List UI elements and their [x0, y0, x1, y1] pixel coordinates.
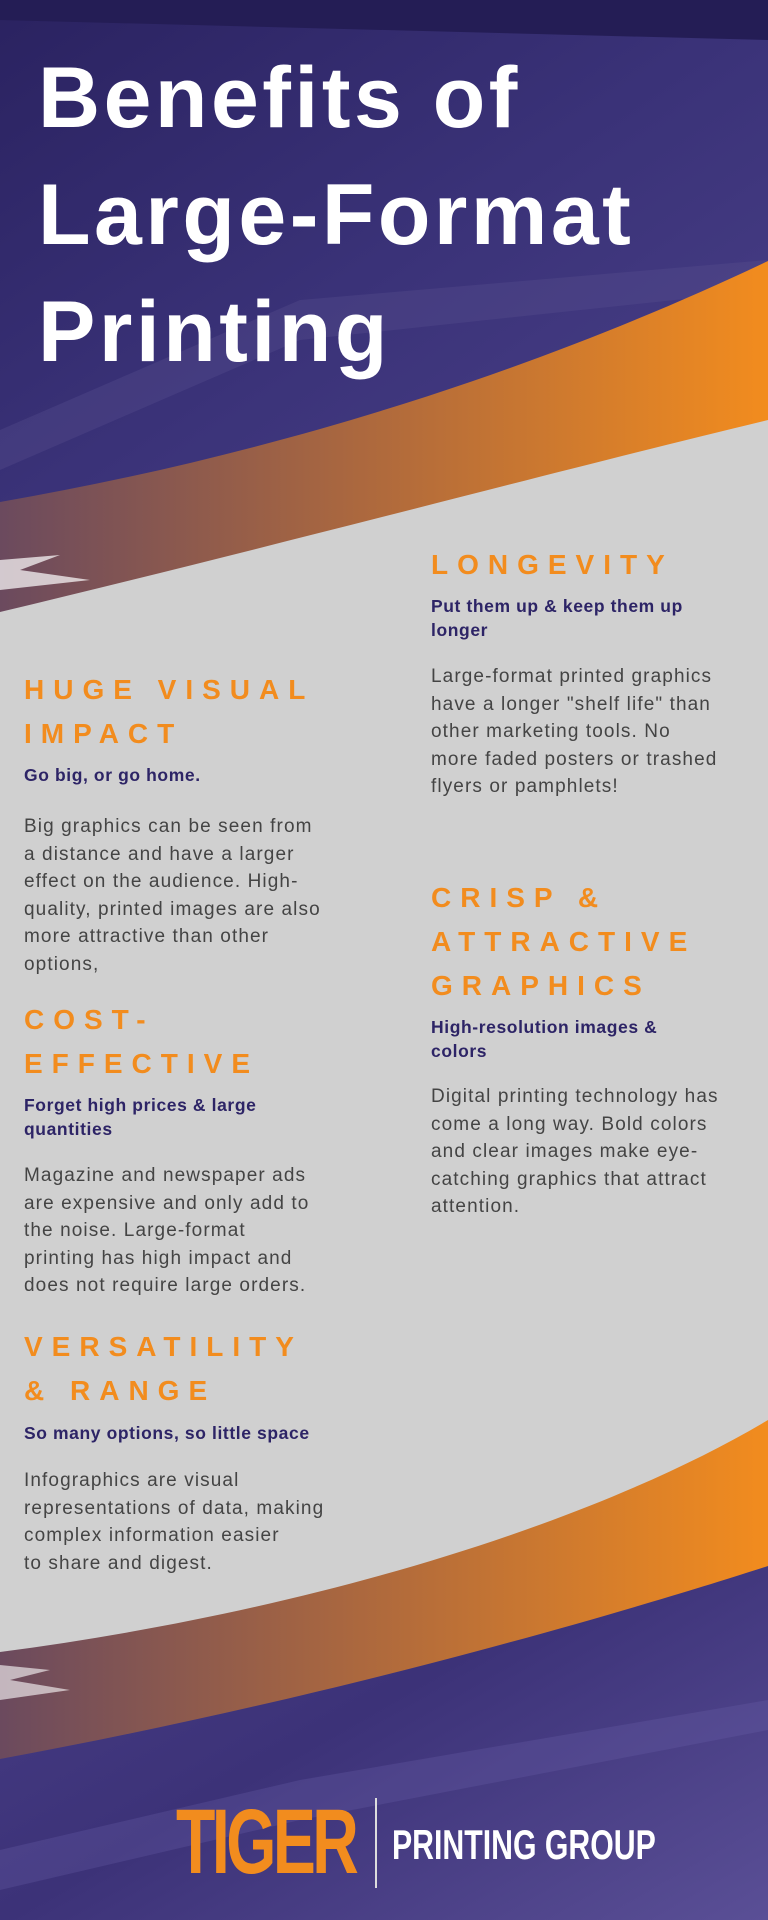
heading: EFFECTIVE: [24, 1048, 259, 1079]
body text: are expensive and only add to: [24, 1192, 309, 1214]
logo text: PRINTING GROUP: [392, 1821, 656, 1868]
title: Printing: [38, 284, 391, 380]
body text: printing has high impact and: [24, 1248, 292, 1268]
subheading: colors: [431, 1041, 487, 1061]
body text: quality, printed images are also: [24, 898, 321, 920]
orange brush stroke top: [0, 261, 768, 612]
body text: flyers or pamphlets!: [431, 776, 619, 797]
heading: IMPACT: [24, 718, 183, 749]
body text: the noise. Large-format: [24, 1220, 246, 1241]
body text: more faded posters or trashed: [431, 748, 717, 770]
body text: [431, 666, 717, 797]
body text: [431, 1086, 719, 1217]
body text: other marketing tools. No: [431, 721, 671, 742]
subheading: High-resolution images &: [431, 1017, 657, 1037]
body text: Big graphics can be seen from: [24, 816, 313, 837]
title: Large-Format: [38, 167, 634, 263]
subheading: Go big, or go home.: [24, 765, 201, 785]
body text: come a long way. Bold colors: [431, 1114, 708, 1134]
heading: & RANGE: [24, 1375, 216, 1406]
orange brush stroke bottom: [0, 1420, 768, 1759]
logo: tiger printing group: [176, 1791, 656, 1893]
heading: [24, 1004, 259, 1079]
body text: have a longer "shelf life" than: [431, 694, 711, 714]
panel: longevity: [431, 549, 717, 797]
body text: more attractive than other: [24, 926, 269, 947]
subheading: So many options, so little space: [24, 1423, 310, 1443]
logo divider: [375, 1798, 377, 1888]
body text: options,: [24, 954, 99, 974]
heading: ATTRACTIVE: [431, 926, 696, 957]
subheading: Forget high prices & large: [24, 1095, 256, 1115]
subheading: [431, 1017, 657, 1061]
heading: [431, 882, 696, 1001]
heading: LONGEVITY: [431, 549, 674, 580]
body text: effect on the audience. High-: [24, 871, 298, 892]
body text: and clear images make eye-: [431, 1141, 698, 1162]
heading: [24, 1331, 303, 1406]
body text: Digital printing technology has: [431, 1086, 719, 1107]
logo wordmark TIGER: TIGER: [176, 1791, 355, 1893]
body text: does not require large orders.: [24, 1275, 306, 1296]
subheading: [431, 596, 683, 640]
panel: cost-effective: [24, 1004, 309, 1296]
heading: CRISP &: [431, 882, 607, 913]
body text: [24, 1470, 324, 1574]
body text: catching graphics that attract: [431, 1168, 707, 1190]
title: [38, 50, 634, 380]
panel: huge visual impact: [24, 674, 321, 974]
heading: COST-: [24, 1004, 155, 1035]
body text: complex information easier: [24, 1525, 280, 1546]
heading: [24, 674, 314, 749]
body text: Infographics are visual: [24, 1470, 239, 1491]
subheading: quantities: [24, 1119, 113, 1139]
heading: GRAPHICS: [431, 970, 651, 1001]
heading: HUGE VISUAL: [24, 674, 314, 705]
subheading: longer: [431, 620, 488, 640]
subheading: [24, 1095, 256, 1139]
heading: VERSATILITY: [24, 1331, 303, 1362]
body text: [24, 816, 321, 974]
subheading: Put them up & keep them up: [431, 596, 683, 616]
title: Benefits of: [38, 50, 521, 146]
body text: a distance and have a larger: [24, 844, 295, 864]
body text: [24, 1165, 309, 1296]
panel: crisp & attractive graphics: [431, 882, 719, 1217]
body text: to share and digest.: [24, 1552, 213, 1574]
body text: Magazine and newspaper ads: [24, 1165, 306, 1186]
panel: versatility & range: [24, 1331, 324, 1574]
body text: representations of data, making: [24, 1498, 324, 1518]
body text: attention.: [431, 1196, 520, 1217]
body text: Large-format printed graphics: [431, 666, 712, 687]
